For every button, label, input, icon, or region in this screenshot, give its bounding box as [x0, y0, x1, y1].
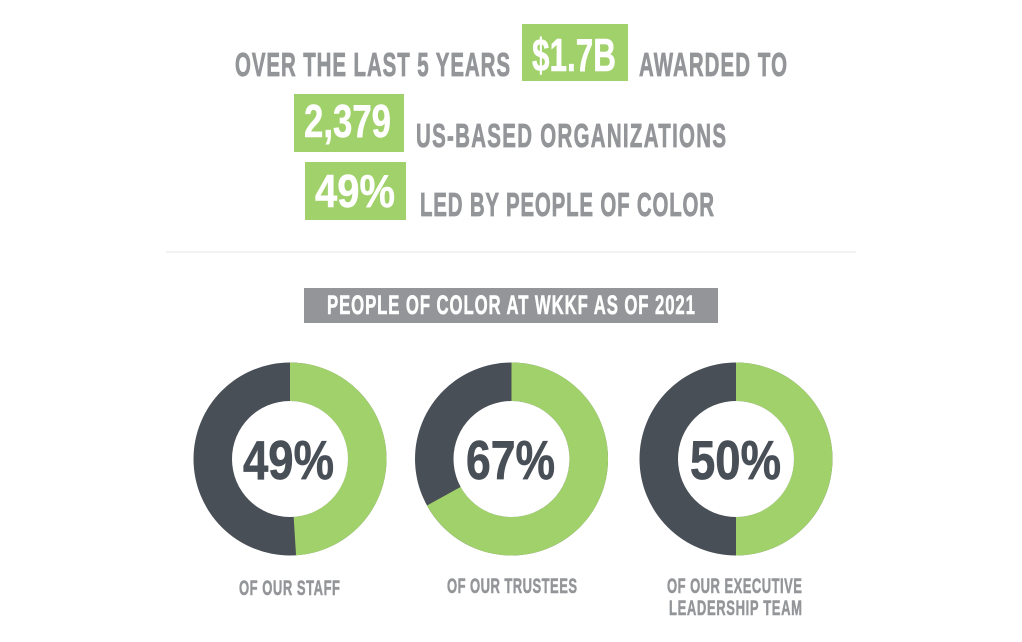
stat line: over the last 5 years $1.7B awarded to: OVER THE LAST 5 YEARS — [235, 46, 510, 83]
stat line: 2,379 US-based organizations — [294, 94, 726, 154]
stat line: 49% led by people of color: LED BY PEOPLE OF COLOR — [420, 186, 714, 223]
label: of our executive leadership team — [667, 574, 802, 620]
stat line: over the last 5 years $1.7B awarded to: $1.7B — [532, 29, 616, 81]
stat line: 2,379 US-based organizations: US-BASED ORGANIZATIONS — [416, 117, 726, 154]
stat line: 49% led by people of color — [305, 162, 714, 223]
donut chart: 50% of our executive leadership team — [640, 362, 832, 556]
donut chart: 50% of our executive leadership team: 50% — [690, 429, 781, 491]
label: of our executive leadership team: LEADERSHIP TEAM — [669, 596, 802, 620]
stat line: over the last 5 years $1.7B awarded to: AWARDED TO — [639, 46, 787, 83]
donut chart: 67% of our trustees: 67% — [466, 429, 555, 491]
label: of our executive leadership team: OF OUR EXECUTIVE — [667, 574, 802, 598]
donut chart: 49% of our staff: 49% — [243, 429, 334, 491]
stat line: over the last 5 years $1.7B awarded to — [235, 24, 787, 83]
heading: people of color at WKKF as of 2021: PEOPLE OF COLOR AT WKKF AS OF 2021 — [327, 290, 695, 320]
stat line: 2,379 US-based organizations: 2,379 — [304, 95, 391, 147]
donut chart: 67% of our trustees — [415, 362, 608, 556]
label: of our trustees: OF OUR TRUSTEES — [447, 574, 577, 598]
donut chart: 49% of our staff — [194, 362, 387, 556]
stat line: 49% led by people of color: 49% — [315, 165, 395, 217]
label: of our staff: OF OUR STAFF — [239, 576, 340, 600]
